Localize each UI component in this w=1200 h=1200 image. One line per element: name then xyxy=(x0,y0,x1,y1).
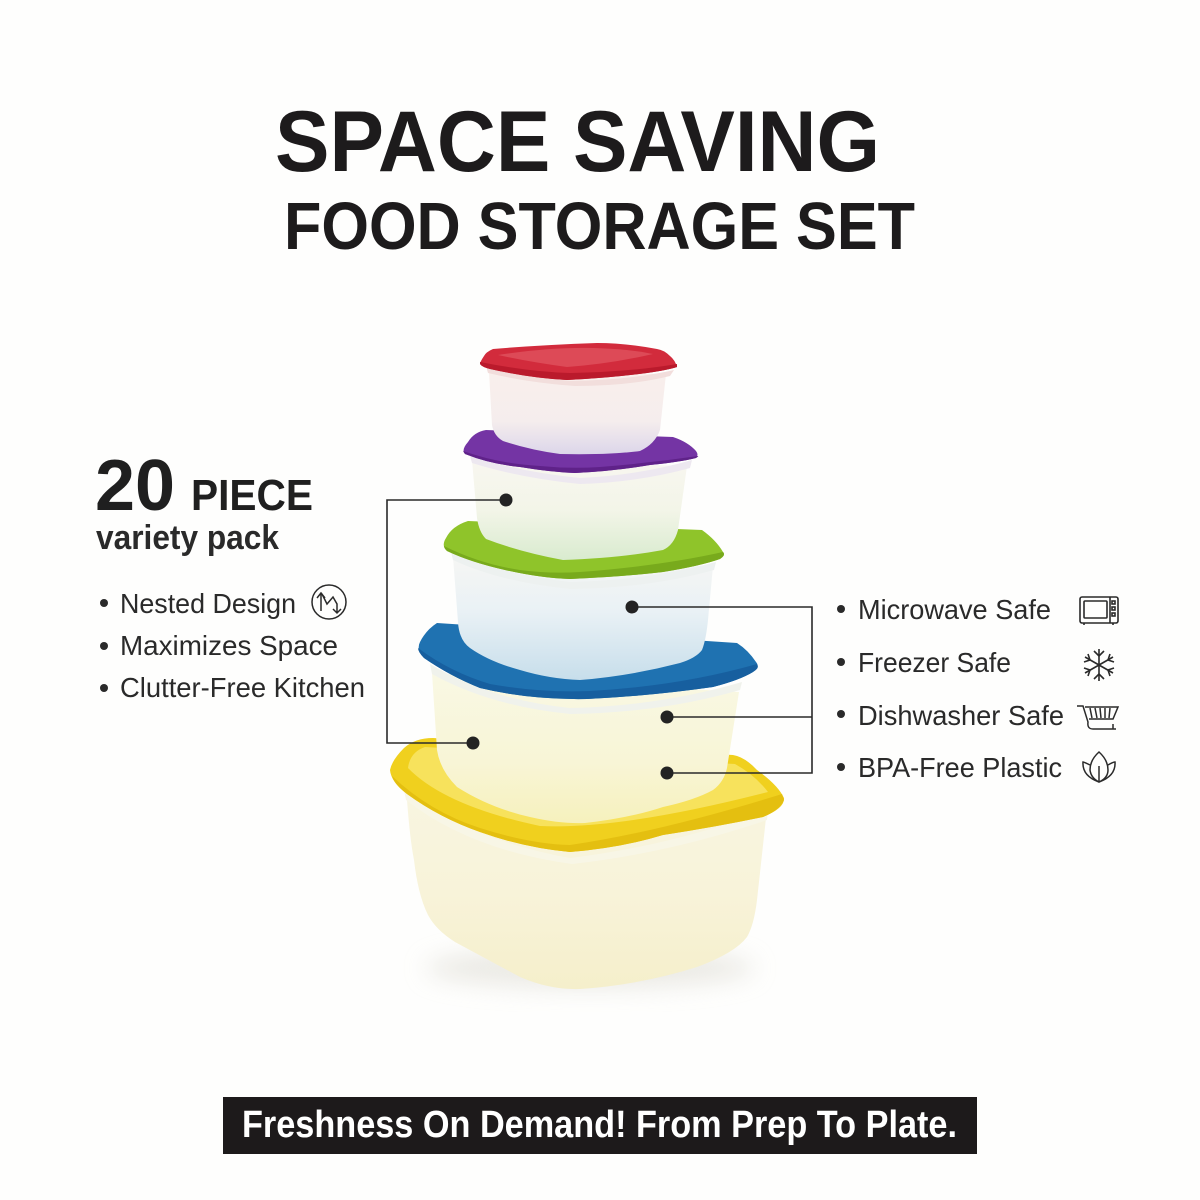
panel: stacked food containers xyxy=(390,343,784,989)
freezer safe xyxy=(837,647,1114,681)
yellow container xyxy=(390,738,784,989)
subheading: variety pack: variety pack xyxy=(96,519,279,557)
icon: leaves xyxy=(1083,752,1115,782)
microwave safe: Microwave Safe xyxy=(858,594,1051,625)
bpa-free plastic: BPA-Free Plastic xyxy=(858,752,1062,783)
freezer safe: Freezer Safe xyxy=(858,647,1011,678)
title: FOOD STORAGE SET xyxy=(284,189,915,264)
dishwasher safe: Dishwasher Safe xyxy=(858,700,1064,731)
callout: right leader lines xyxy=(626,600,812,780)
title: SPACE SAVING xyxy=(275,94,880,190)
heading: 20 piece: 20 xyxy=(95,446,175,526)
feature list xyxy=(100,588,365,703)
floor shadow xyxy=(425,948,755,988)
panel: 20 piece variety pack xyxy=(95,446,365,703)
feature list: Maximizes Space xyxy=(120,630,338,661)
callout: left leader line xyxy=(387,494,512,750)
heading: 20 piece xyxy=(95,446,313,526)
blue container xyxy=(418,623,758,823)
icon: microwave xyxy=(1080,597,1118,625)
purple container xyxy=(463,430,698,560)
green container xyxy=(444,521,724,680)
banner: tagline xyxy=(223,1097,977,1154)
icon: dish rack xyxy=(1077,706,1118,729)
panel: safety features xyxy=(837,594,1118,783)
feature list: Clutter-Free Kitchen xyxy=(120,672,365,703)
title xyxy=(275,94,915,264)
heading: 20 piece: PIECE xyxy=(191,471,313,520)
red container xyxy=(480,343,677,454)
icon: snowflake xyxy=(1084,649,1114,681)
icon: nested arrows xyxy=(312,585,346,619)
banner: tagline: Freshness On Demand! From Prep To Plate. xyxy=(242,1104,957,1146)
feature list: Nested Design xyxy=(120,588,296,619)
